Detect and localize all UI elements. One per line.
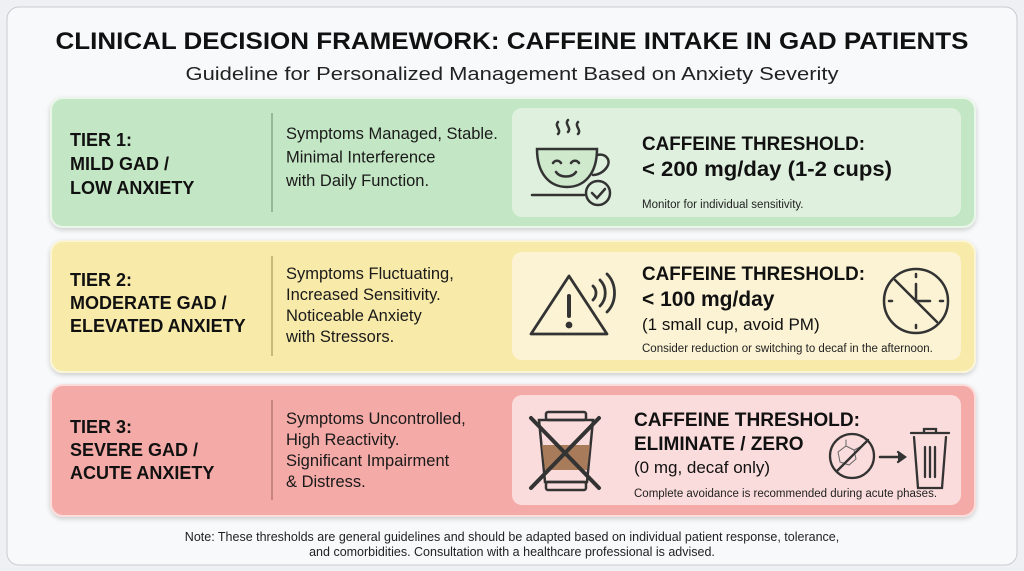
footnote: Note: These thresholds are general guidelines and should be adapted based on individual patient response, tolerance, [185, 530, 839, 544]
tier 3 label: ACUTE ANXIETY [70, 463, 214, 483]
tier 2 threshold box: < 100 mg/day [642, 288, 775, 311]
tier 3 threshold box: ELIMINATE / ZERO [634, 434, 804, 455]
tier 1 threshold box: Monitor for individual sensitivity. [642, 199, 804, 211]
tier 3 label: SEVERE GAD / [70, 440, 198, 460]
icon: happy cup [532, 120, 610, 205]
subtitle: Guideline for Personalized Management Based on Anxiety Severity [186, 64, 838, 84]
tier 3 threshold box: (0 mg, decaf only) [634, 458, 770, 477]
tier 3 description: Significant Impairment [286, 452, 450, 470]
tier 2 label: MODERATE GAD / [70, 293, 227, 313]
panel: tier 3 [51, 385, 975, 516]
tier 1 description: Minimal Interference [286, 148, 435, 166]
tier 3 description: Symptoms Uncontrolled, [286, 410, 466, 428]
icon: no molecule to trash [830, 429, 949, 488]
tier 2 description: Symptoms Fluctuating, [286, 265, 454, 283]
threshold text: CAFFEINE THRESHOLD: [642, 134, 865, 155]
tier 2 label: ELEVATED ANXIETY [70, 316, 246, 336]
footnote: and comorbidities. Consultation with a healthcare professional is advised. [309, 545, 715, 559]
icon: warning triangle [531, 274, 614, 334]
panel: tier 2 [51, 241, 975, 372]
tier 1 description: with Daily Function. [285, 172, 429, 190]
tier 2 label: TIER 2: [70, 270, 132, 290]
tier 1 threshold box: < 200 mg/day (1-2 cups) [642, 158, 892, 181]
tier 2 threshold box [512, 252, 961, 360]
tier 3 threshold box [512, 395, 961, 505]
tier 3 label: TIER 3: [70, 417, 132, 437]
icon: crossed coffee cup [531, 412, 599, 490]
threshold text: CAFFEINE THRESHOLD: [642, 264, 865, 285]
tier 1 threshold box [512, 108, 961, 217]
tier 2 description: Noticeable Anxiety [286, 307, 422, 325]
tier 3 description: High Reactivity. [286, 431, 399, 449]
tier 1 label: MILD GAD / [70, 154, 169, 174]
tier 2 threshold box: Consider reduction or switching to decaf in the afternoon. [642, 343, 933, 355]
tier 2 description: Increased Sensitivity. [286, 286, 441, 304]
tier 3 threshold box: Complete avoidance is recommended during acute phases. [634, 488, 937, 500]
icon: crossed clock [884, 269, 948, 333]
threshold text: CAFFEINE THRESHOLD: [634, 410, 860, 431]
tier 1 label: LOW ANXIETY [70, 178, 194, 198]
tier 1 label: TIER 1: [70, 130, 132, 150]
panel: tier 1 [51, 98, 975, 227]
tier 3 description: & Distress. [286, 473, 366, 491]
tier 2 description: with Stressors. [285, 328, 394, 346]
tier 1 description: Symptoms Managed, Stable. [286, 125, 498, 143]
title: CLINICAL DECISION FRAMEWORK: CAFFEINE INTAKE IN GAD PATIENTS [56, 28, 968, 55]
tier 2 threshold box: (1 small cup, avoid PM) [642, 315, 820, 334]
